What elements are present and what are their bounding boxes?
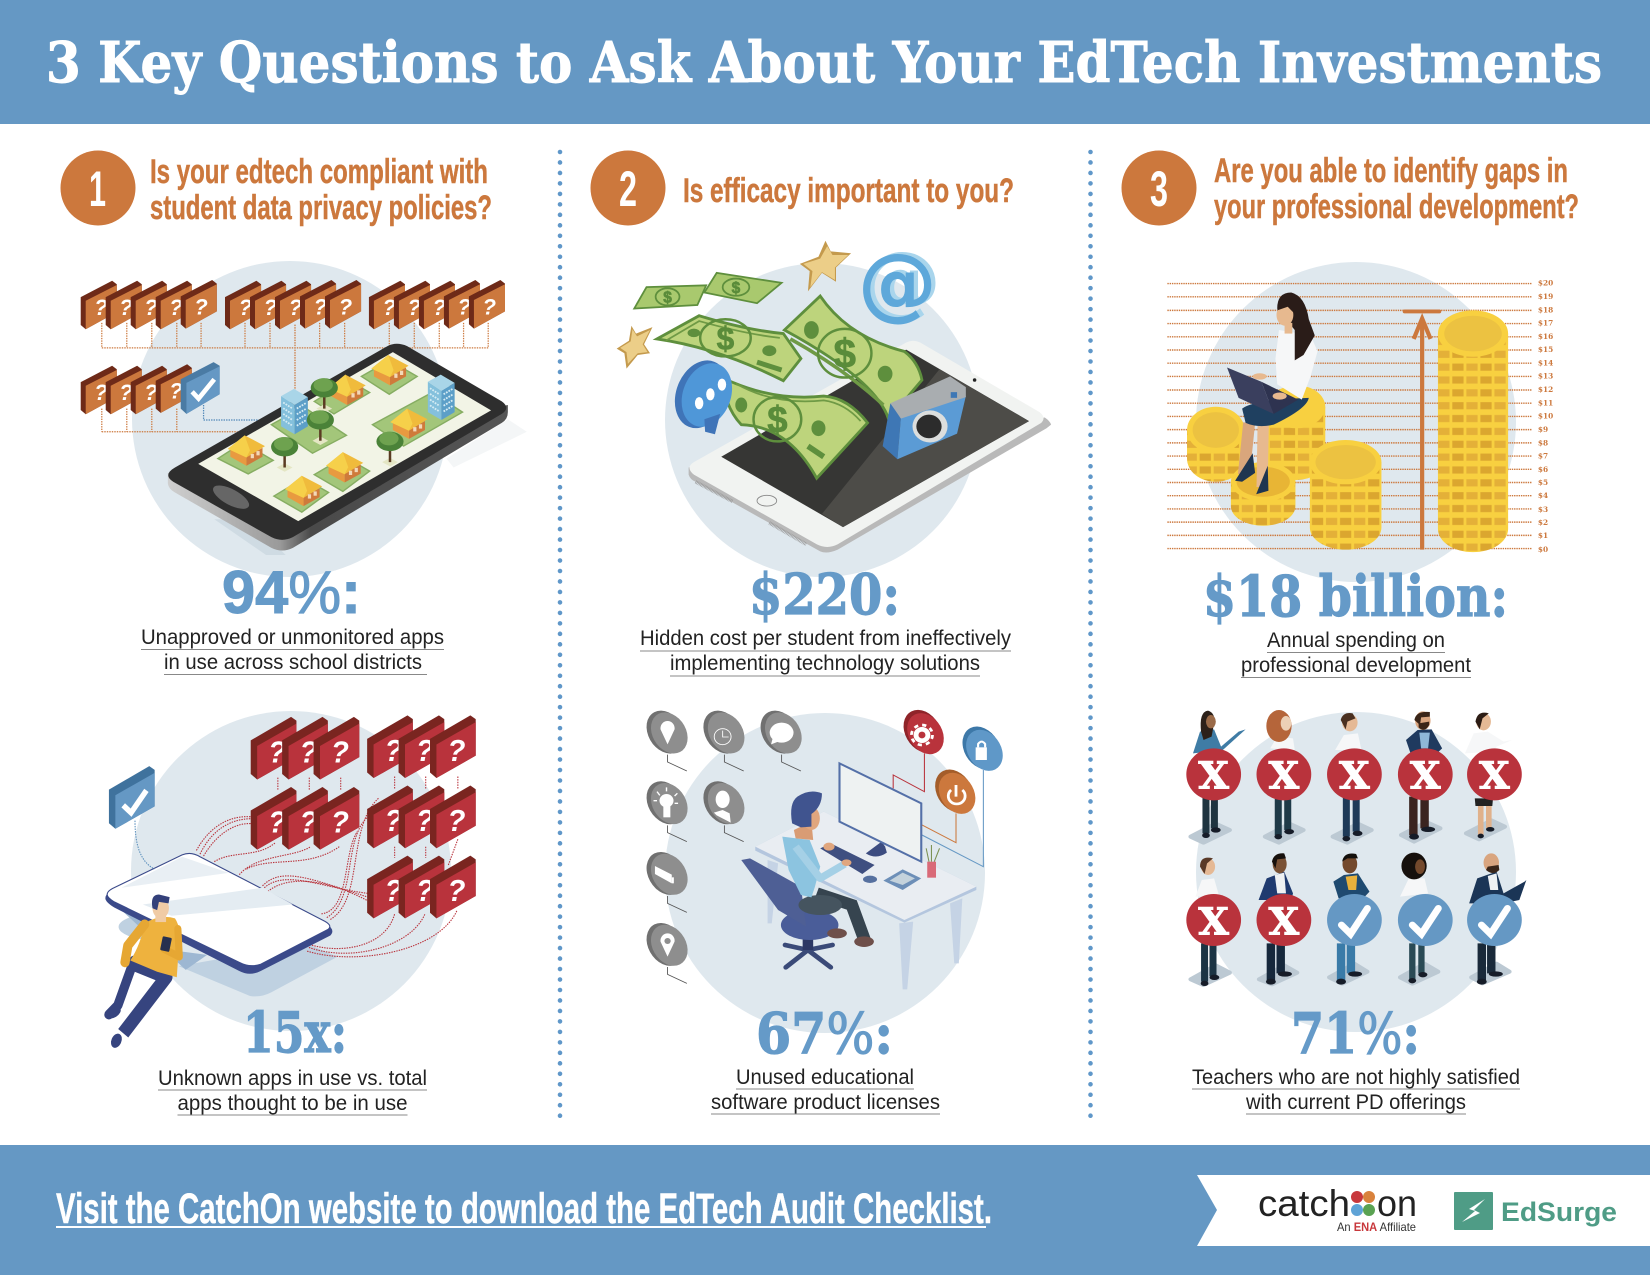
teacher 7 xyxy=(1259,853,1293,980)
lawns xyxy=(218,360,462,512)
dollar axis labels: $5 xyxy=(1538,478,1548,487)
badge row two: mixed: X xyxy=(1269,900,1299,944)
description 67%: Unused educational xyxy=(736,1066,914,1089)
app cards: unapproved apps top row xyxy=(81,280,505,329)
stat 71%: 71%: xyxy=(1291,1001,1420,1067)
description 15x xyxy=(158,1067,427,1115)
app cards: unapproved apps top row: ? xyxy=(144,295,158,320)
red question cards: ? xyxy=(447,734,465,768)
description 15x: Unknown apps in use vs. total xyxy=(158,1067,427,1090)
dollar axis labels: $12 xyxy=(1538,385,1553,394)
phone shadow xyxy=(446,419,527,467)
chart: coins and dollar scale xyxy=(1167,279,1553,554)
red question cards: ? xyxy=(416,875,434,908)
red question cards: ? xyxy=(268,736,286,770)
number badge 1 xyxy=(60,150,136,226)
number badge 3: 3 xyxy=(1150,161,1168,217)
icon: approved app check card xyxy=(181,362,220,414)
red question cards: ? xyxy=(385,875,403,908)
icon: star large xyxy=(800,241,851,291)
app cards: unapproved apps top row: ? xyxy=(408,295,422,320)
description 67%: software product licenses xyxy=(711,1091,940,1114)
logo ribbon xyxy=(1197,1175,1650,1246)
red question cards: ? xyxy=(385,734,403,768)
teacher 9 xyxy=(1400,853,1428,979)
trees xyxy=(271,378,404,472)
heading 3 xyxy=(1214,152,1579,226)
illustration: smartphone with unapproved apps xyxy=(81,280,527,555)
large bill left: $ xyxy=(717,320,735,356)
number badge 2: 2 xyxy=(619,161,637,217)
stat 67%: 67%: xyxy=(756,1001,893,1067)
app cards: unapproved apps top row: ? xyxy=(119,295,133,320)
red question cards: ? xyxy=(268,806,286,840)
app cards: second row: ? xyxy=(119,380,133,405)
description 94% xyxy=(141,626,444,674)
app cards: unapproved apps top row: ? xyxy=(433,295,447,320)
floor shadows xyxy=(1191,820,1510,985)
icon: star small xyxy=(617,326,652,369)
logo: CatchOn: catch xyxy=(1258,1183,1350,1224)
illustration: teachers with satisfaction badges xyxy=(1186,710,1526,986)
dollar axis labels: $4 xyxy=(1538,491,1548,500)
app cards: unapproved apps top row: ? xyxy=(458,294,472,319)
dollar axis labels: $7 xyxy=(1538,452,1548,461)
small bills xyxy=(634,273,782,309)
dollar axis labels: $2 xyxy=(1538,518,1548,527)
red question cards: ? xyxy=(416,804,434,838)
app cards: unapproved apps top row: ? xyxy=(339,294,353,319)
app cards: unapproved apps top row: ? xyxy=(314,294,328,319)
monitor xyxy=(840,763,921,862)
tablet xyxy=(105,853,332,974)
coin stack under feet xyxy=(1231,462,1295,526)
description 15x: apps thought to be in use xyxy=(178,1092,408,1115)
buildings xyxy=(281,375,455,434)
large bill right xyxy=(784,296,922,419)
app cards: unapproved apps top row: ? xyxy=(169,295,183,320)
badge row two: mixed xyxy=(1186,894,1522,946)
small bills: $ xyxy=(732,280,741,297)
description 71% xyxy=(1192,1066,1520,1114)
tablet shadow xyxy=(119,910,337,996)
teacher 8 xyxy=(1333,854,1369,980)
arrow to $18 xyxy=(1405,311,1439,550)
background circle xyxy=(1196,712,1516,1032)
grey icon: pin xyxy=(639,704,695,771)
large bill right: $ xyxy=(834,330,856,377)
blue connector xyxy=(135,821,154,869)
red question cards: ? xyxy=(447,875,465,908)
badge row one: not satisfied: X xyxy=(1269,755,1299,798)
coin stack tall xyxy=(1438,310,1508,552)
red question cards: ? xyxy=(416,734,434,768)
logo: CatchOn xyxy=(1258,1183,1417,1234)
description 71%: Teachers who are not highly satisfied xyxy=(1192,1066,1520,1089)
teacher 4 xyxy=(1406,711,1442,835)
dollar axis labels: $18 xyxy=(1538,305,1553,315)
logo: CatchOn: An ENA Affiliate xyxy=(1337,1220,1416,1234)
background circle xyxy=(1196,262,1516,582)
grey icon: pin xyxy=(639,917,695,983)
app cards: unapproved apps top row: ? xyxy=(264,295,278,320)
dollar axis labels: $10 xyxy=(1538,412,1553,421)
dollar axis labels: $6 xyxy=(1538,465,1548,474)
grey icon: clock xyxy=(696,704,752,771)
teacher 6 xyxy=(1195,858,1219,982)
red question cards: ? xyxy=(331,736,349,770)
heading 2: Is efficacy important to you? xyxy=(683,172,1014,210)
large bill lower: $ xyxy=(767,399,788,440)
icon: lock xyxy=(955,720,1010,777)
dollar axis labels: $3 xyxy=(1538,505,1548,514)
dollar axis labels: $17 xyxy=(1538,319,1553,328)
teacher 2 xyxy=(1266,710,1295,835)
dollar axis labels: $15 xyxy=(1538,345,1553,354)
description $220: Hidden cost per student from ineffectively xyxy=(640,627,1011,650)
icon: at sign: @ xyxy=(862,234,941,328)
illustration: money flying from tablet xyxy=(617,234,1051,553)
description 67% xyxy=(711,1066,940,1114)
approved app check card xyxy=(109,766,155,829)
heading 1: student data privacy policies? xyxy=(150,189,492,227)
description $220 xyxy=(640,627,1011,676)
app cards: unapproved apps top row: ? xyxy=(383,295,397,320)
number badge 1: 1 xyxy=(89,161,106,217)
stat $220: $220: xyxy=(749,562,900,628)
gridlines xyxy=(1167,284,1532,549)
grey icon: video camera xyxy=(639,846,695,912)
keyboard and accessories xyxy=(820,843,940,890)
woman with laptop xyxy=(1227,292,1318,494)
heading 1: Is your edtech compliant with xyxy=(150,153,488,191)
dollar axis labels: $14 xyxy=(1538,358,1553,367)
houses xyxy=(228,355,427,506)
blue connector xyxy=(204,405,259,420)
background circle xyxy=(131,711,451,1031)
panel: question 3 xyxy=(1122,150,1579,1114)
icon: settings gear xyxy=(896,703,951,760)
connector lines to coloured icons xyxy=(893,753,983,867)
badge row one: not satisfied xyxy=(1186,748,1522,800)
description 94%: Unapproved or unmonitored apps xyxy=(141,626,444,649)
description $18 billion: Annual spending on xyxy=(1267,629,1445,652)
icon: at sign: @ xyxy=(858,236,937,330)
coin stack middle xyxy=(1310,440,1381,550)
panel: question 2 xyxy=(590,150,1051,1114)
red question cards: ? xyxy=(447,804,465,838)
dollar axis labels: $16 xyxy=(1538,332,1553,341)
dollar axis labels: $20 xyxy=(1538,279,1553,288)
coin stack behind woman xyxy=(1268,385,1325,480)
teacher 5 xyxy=(1465,713,1512,835)
number badge 3 xyxy=(1122,150,1196,226)
description 94%: in use across school districts xyxy=(164,651,422,674)
app cards: second row: ? xyxy=(144,380,158,405)
stat $18 billion: $18 billion: xyxy=(1203,564,1508,630)
app cards: unapproved apps top row: ? xyxy=(194,294,208,319)
dollar axis labels: $0 xyxy=(1538,545,1548,554)
app cards: second row xyxy=(81,364,192,414)
app cards: unapproved apps top row: ? xyxy=(289,295,303,320)
dollar axis labels: $9 xyxy=(1538,425,1548,434)
logo: EdSurge xyxy=(1454,1192,1617,1230)
large bill left xyxy=(657,316,801,381)
number badge 2 xyxy=(590,150,666,226)
badge row one: not satisfied: X xyxy=(1339,755,1370,798)
red question cards xyxy=(251,715,476,918)
illustration: person at desk with unused licenses xyxy=(639,703,1010,989)
small bills: $ xyxy=(663,289,672,307)
large bill lower xyxy=(727,380,868,478)
app cards: unapproved apps top row: ? xyxy=(239,295,253,320)
red question cards: ? xyxy=(300,806,318,840)
dollar axis labels: $11 xyxy=(1538,398,1553,407)
footer band xyxy=(0,1145,1650,1275)
grey icon: speech bubble xyxy=(753,704,809,771)
dollar axis labels: $13 xyxy=(1538,372,1553,381)
stat 15x: 15x: xyxy=(243,1000,347,1066)
red question cards: ? xyxy=(385,804,403,838)
dollar axis labels xyxy=(1538,279,1553,554)
phone xyxy=(168,344,508,555)
teacher 10 xyxy=(1469,853,1526,980)
tablet xyxy=(689,341,1051,553)
app cards: second row: ? xyxy=(169,379,183,404)
dollar axis labels: $19 xyxy=(1538,292,1553,301)
teacher 3 xyxy=(1335,713,1361,837)
heading 1 xyxy=(150,153,492,227)
description $18 billion xyxy=(1241,629,1471,678)
dollar axis labels: $1 xyxy=(1538,531,1548,540)
chair xyxy=(741,858,838,967)
badge row one: not satisfied: X xyxy=(1479,755,1510,798)
grey icon: user xyxy=(696,775,752,842)
app cards: unapproved apps top row: ? xyxy=(94,295,108,320)
column divider 1 xyxy=(558,152,562,1117)
description 71%: with current PD offerings xyxy=(1245,1091,1466,1114)
background circle xyxy=(132,261,448,577)
header band xyxy=(0,0,1650,124)
description $18 billion: professional development xyxy=(1241,654,1471,677)
badge row two: mixed: X xyxy=(1198,900,1229,944)
badge row one: not satisfied: X xyxy=(1198,755,1229,798)
call to action: Visit the CatchOn website to download the EdTech Audit Checklist. xyxy=(56,1185,992,1233)
grey icon: light bulb xyxy=(639,775,695,842)
logo: CatchOn: on xyxy=(1377,1183,1417,1224)
app cards: unapproved apps top row: ? xyxy=(483,294,497,319)
badge row one: not satisfied: X xyxy=(1410,755,1441,798)
connector lines xyxy=(102,323,488,432)
person with phone xyxy=(104,894,180,1050)
background circle xyxy=(665,263,979,577)
dollar axis labels: $8 xyxy=(1538,438,1548,447)
icon: camera xyxy=(883,376,966,459)
stat 94%: 94%: xyxy=(222,559,361,626)
logo: EdSurge: EdSurge xyxy=(1501,1197,1617,1227)
illustration: unknown apps and tablet xyxy=(104,715,476,1050)
person at computer xyxy=(782,791,874,947)
coin stack left xyxy=(1187,407,1245,482)
icon: power button xyxy=(928,763,983,820)
red question cards: ? xyxy=(331,806,349,840)
description $220: implementing technology solutions xyxy=(670,652,980,675)
icon: chat bubble xyxy=(665,352,741,436)
background circle xyxy=(665,713,985,1033)
app cards: second row: ? xyxy=(94,380,108,405)
shoes xyxy=(1201,827,1503,986)
teacher 1 xyxy=(1193,711,1246,833)
connection paths xyxy=(196,777,458,957)
desk xyxy=(755,812,976,989)
red question cards: ? xyxy=(300,736,318,770)
column divider 2 xyxy=(1088,152,1093,1117)
